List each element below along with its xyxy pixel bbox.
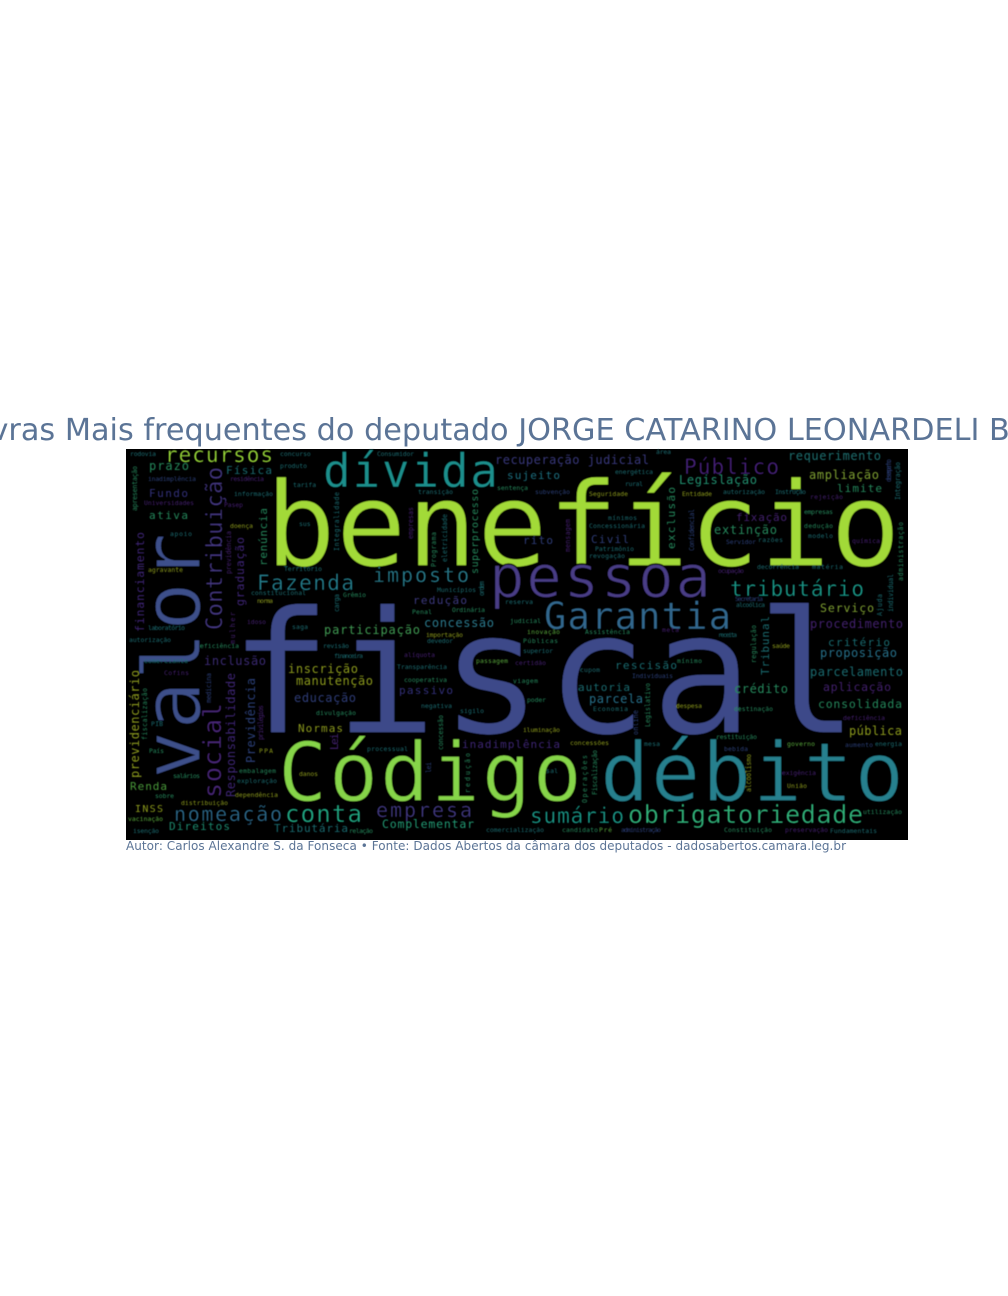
medium horizontal words: Física bbox=[226, 464, 272, 477]
small horizontal words: sus bbox=[299, 520, 311, 528]
small horizontal words: Transparência bbox=[397, 663, 447, 671]
medium vertical words: superprocesso bbox=[470, 489, 481, 574]
medium horizontal words: manutenção bbox=[296, 674, 373, 688]
small horizontal words: aumento bbox=[845, 741, 873, 749]
word: Contribuição: Contribuição bbox=[203, 467, 228, 630]
small vertical words: previdência bbox=[225, 531, 233, 574]
medium horizontal words: inscrição bbox=[288, 662, 358, 676]
small horizontal words: administração bbox=[621, 826, 661, 834]
small horizontal words: revogação bbox=[589, 552, 625, 560]
small horizontal words: União bbox=[787, 782, 807, 790]
small horizontal words: negativa bbox=[421, 702, 452, 710]
medium horizontal words: critério bbox=[828, 636, 890, 649]
small horizontal words: restituição bbox=[716, 733, 757, 741]
small vertical words: Fiscalização bbox=[591, 750, 599, 795]
word: dívida: dívida bbox=[323, 444, 498, 498]
small horizontal words: receita bbox=[718, 631, 737, 639]
small horizontal words: norma bbox=[257, 597, 273, 605]
small vertical words: Lei bbox=[328, 733, 341, 750]
word: Fazenda: Fazenda bbox=[257, 571, 354, 595]
small horizontal words: relação bbox=[349, 827, 373, 835]
small horizontal words: mesa bbox=[644, 740, 660, 748]
small horizontal words: Ordinária bbox=[452, 606, 485, 614]
small horizontal words: reserva bbox=[505, 598, 533, 606]
word: sumário: sumário bbox=[530, 804, 624, 828]
small vertical words: desempenho bbox=[885, 459, 893, 482]
small vertical words: Ajuda bbox=[876, 594, 884, 616]
small horizontal words: transição bbox=[418, 488, 453, 496]
medium horizontal words: Tributária bbox=[274, 822, 348, 835]
small horizontal words: energética bbox=[615, 468, 653, 476]
small horizontal words: exploração bbox=[237, 777, 277, 785]
small horizontal words: PIB bbox=[151, 720, 163, 728]
small horizontal words: superior bbox=[523, 647, 553, 655]
small horizontal words: comerciante bbox=[144, 657, 188, 665]
small horizontal words: saga bbox=[292, 623, 308, 631]
medium horizontal words: Normas bbox=[298, 722, 343, 735]
small horizontal words: Individuais bbox=[632, 672, 673, 680]
small vertical words bbox=[131, 459, 905, 803]
medium horizontal words: requerimento bbox=[788, 449, 881, 463]
small horizontal words: exigência bbox=[782, 769, 816, 777]
small horizontal words: certidão bbox=[515, 659, 546, 667]
word: débito: débito bbox=[600, 726, 904, 821]
small horizontal words: autorização bbox=[723, 488, 765, 496]
small horizontal words: Grêmio bbox=[343, 591, 366, 599]
word: fiscal: fiscal bbox=[229, 575, 859, 774]
word: recursos: recursos bbox=[165, 443, 273, 467]
small horizontal words: isenção bbox=[133, 827, 159, 835]
small horizontal words: devedor bbox=[427, 637, 453, 645]
small horizontal words: sal bbox=[546, 767, 558, 775]
small vertical words: redução bbox=[464, 753, 472, 793]
small horizontal words: Municípios bbox=[437, 586, 476, 594]
small horizontal words: bebida bbox=[724, 745, 748, 753]
medium horizontal words: Direitos bbox=[169, 820, 230, 833]
small horizontal words: Pré bbox=[599, 826, 612, 834]
word: valor: valor bbox=[126, 533, 219, 779]
small vertical words: online bbox=[632, 710, 640, 735]
small horizontal words: inovação bbox=[527, 628, 560, 636]
small horizontal words: concurso bbox=[280, 450, 311, 458]
word: social: social bbox=[198, 703, 227, 798]
small horizontal words: preservação bbox=[785, 826, 828, 834]
small horizontal words: meta bbox=[662, 626, 679, 634]
medium vertical words: exclusão bbox=[665, 487, 678, 549]
small horizontal words: divulgação bbox=[316, 709, 356, 717]
medium horizontal words: aplicação bbox=[823, 680, 891, 694]
word cloud background bbox=[126, 449, 908, 840]
small horizontal words: Território bbox=[284, 565, 322, 573]
small horizontal words: agravante bbox=[148, 566, 183, 574]
small horizontal words: informação bbox=[234, 490, 273, 498]
small horizontal words: matéria bbox=[812, 563, 843, 571]
small horizontal words: viagem bbox=[513, 677, 538, 685]
small horizontal words: ocupação bbox=[718, 567, 744, 575]
small horizontal words: sobre bbox=[155, 792, 174, 800]
word: empresa: empresa bbox=[376, 798, 472, 822]
small horizontal words: autorização bbox=[129, 636, 171, 644]
small horizontal words: Seguridade bbox=[589, 490, 628, 498]
word: obrigatoriedade: obrigatoriedade bbox=[628, 800, 863, 829]
small horizontal words bbox=[128, 448, 902, 835]
medium horizontal words: Complementar bbox=[382, 817, 474, 831]
word: tributário: tributário bbox=[730, 577, 864, 601]
small horizontal words: Servidor bbox=[726, 538, 756, 546]
medium horizontal words: proposição bbox=[820, 646, 897, 660]
small horizontal words: Secretaria bbox=[735, 595, 763, 603]
small horizontal words: idoso bbox=[247, 618, 266, 626]
small horizontal words: judicial bbox=[510, 617, 541, 625]
small horizontal words: salários bbox=[173, 772, 200, 780]
small vertical words: Programa bbox=[430, 532, 438, 567]
medium vertical words: Previdência bbox=[244, 678, 258, 763]
word: conta: conta bbox=[285, 800, 362, 828]
word: benefício: benefício bbox=[265, 456, 901, 594]
small horizontal words: importação bbox=[426, 631, 463, 639]
medium horizontal words: INSS bbox=[135, 804, 163, 815]
small vertical words: individual bbox=[887, 574, 895, 612]
small horizontal words: comercialização bbox=[486, 826, 544, 834]
medium horizontal words: educação bbox=[294, 691, 356, 705]
small vertical words: Operações bbox=[581, 755, 589, 803]
small horizontal words: saúde bbox=[772, 642, 790, 650]
small vertical words: regulação bbox=[750, 625, 758, 663]
small vertical words: medicina bbox=[205, 673, 213, 703]
medium horizontal words: rito bbox=[523, 534, 553, 547]
medium horizontal words: inclusão bbox=[204, 654, 266, 668]
small horizontal words: iluminação bbox=[523, 726, 560, 734]
small vertical words: Confidencial bbox=[688, 509, 696, 551]
small horizontal words: revisão bbox=[323, 642, 349, 650]
word: Garantia: Garantia bbox=[544, 595, 731, 638]
small horizontal words: mínimos bbox=[608, 514, 637, 522]
small horizontal words: Concessionária bbox=[589, 522, 645, 530]
medium horizontal words: pública bbox=[849, 724, 902, 738]
medium horizontal words: rescisão bbox=[615, 659, 677, 672]
small vertical words: mulher bbox=[229, 612, 237, 644]
medium horizontal words: autoria bbox=[578, 681, 630, 694]
small horizontal words: deficiência bbox=[843, 714, 885, 722]
small horizontal words: produto bbox=[280, 462, 307, 470]
medium horizontal words: passivo bbox=[399, 684, 453, 697]
medium horizontal words: procedimento bbox=[810, 617, 903, 631]
small vertical words: privilégios bbox=[257, 705, 265, 740]
small horizontal words: País bbox=[149, 747, 164, 755]
small vertical words: alcoolismo bbox=[745, 754, 753, 792]
small horizontal words: tarifa bbox=[293, 481, 316, 489]
small horizontal words: Instrução bbox=[775, 488, 806, 496]
medium horizontal words: Civil bbox=[591, 533, 629, 546]
small horizontal words: inadimplência bbox=[148, 475, 196, 483]
small vertical words: fiscalização bbox=[141, 688, 149, 740]
small horizontal words: Economia bbox=[593, 705, 628, 713]
small horizontal words: PPA bbox=[259, 747, 273, 755]
small horizontal words: residência bbox=[230, 475, 264, 483]
medium horizontal words: sujeito bbox=[507, 469, 560, 482]
small horizontal words: passagem bbox=[476, 657, 508, 665]
small horizontal words: dedução bbox=[804, 522, 833, 530]
medium vertical words: graduação bbox=[233, 537, 247, 606]
medium horizontal words: fixação bbox=[736, 511, 787, 524]
small horizontal words: área bbox=[656, 448, 671, 456]
small horizontal words: processual bbox=[367, 745, 408, 753]
small horizontal words: Constituição bbox=[724, 826, 772, 834]
small horizontal words: doença bbox=[230, 522, 253, 530]
small horizontal words: constitucional bbox=[251, 589, 306, 597]
small horizontal words: energia bbox=[875, 740, 902, 748]
small horizontal words: Pasep bbox=[224, 501, 243, 509]
small horizontal words: Fundamentais bbox=[830, 827, 877, 835]
small horizontal words: financeira bbox=[334, 652, 363, 660]
medium horizontal words: participação bbox=[324, 623, 420, 637]
medium horizontal words bbox=[130, 449, 903, 835]
small vertical words: concessão bbox=[437, 715, 445, 750]
small horizontal words: distribuição bbox=[181, 799, 228, 807]
medium vertical words: renúncia bbox=[257, 508, 270, 566]
small vertical words: Integralidade bbox=[333, 492, 341, 551]
medium horizontal words: prazo bbox=[149, 459, 189, 473]
small horizontal words: Patrimônio bbox=[595, 545, 634, 553]
word: pessoa: pessoa bbox=[489, 542, 711, 611]
medium horizontal words: Legislação bbox=[679, 473, 757, 487]
small horizontal words: dependência bbox=[235, 791, 278, 799]
word: nomeação: nomeação bbox=[174, 802, 282, 826]
word: Código: Código bbox=[278, 726, 582, 821]
small vertical words: mensagem bbox=[564, 519, 572, 552]
medium horizontal words: Fundo bbox=[149, 487, 188, 500]
medium horizontal words: ativa bbox=[149, 509, 188, 522]
medium horizontal words: ampliação bbox=[809, 468, 879, 482]
small horizontal words: apoio bbox=[170, 530, 192, 538]
small horizontal words: despesa bbox=[676, 702, 702, 710]
small horizontal words: Consumidor bbox=[377, 450, 414, 458]
medium horizontal words: parcela bbox=[589, 692, 643, 706]
small vertical words: Legislativo bbox=[644, 683, 652, 727]
small horizontal words: vacinação bbox=[128, 815, 163, 823]
medium horizontal words: Renda bbox=[130, 780, 167, 793]
medium horizontal words: extinção bbox=[714, 523, 777, 537]
medium vertical words bbox=[128, 487, 772, 797]
small vertical words: administração bbox=[897, 522, 905, 581]
small horizontal words: alcoólica bbox=[736, 601, 765, 609]
medium horizontal words: recuperação judicial bbox=[495, 453, 649, 467]
small horizontal words: candidato bbox=[562, 826, 598, 834]
small horizontal words: destinação bbox=[734, 705, 773, 713]
small horizontal words: sentença bbox=[497, 484, 528, 492]
small horizontal words: alíquota bbox=[404, 651, 435, 659]
small vertical words: empresas bbox=[407, 507, 415, 539]
small horizontal words: subvenção bbox=[535, 488, 570, 496]
small horizontal words: Penal bbox=[412, 608, 432, 616]
small horizontal words: poder bbox=[527, 696, 546, 704]
footer credit: Autor: Carlos Alexandre S. da Fonseca • Fonte: Dados Abertos da câmara dos deputados - dadosabertos.camara.leg.br bbox=[126, 839, 846, 853]
small horizontal words: sigilo bbox=[460, 707, 484, 715]
small horizontal words: modelo bbox=[808, 532, 833, 540]
medium horizontal words: redução bbox=[413, 594, 467, 607]
small horizontal words: eficiência bbox=[200, 642, 239, 650]
word: imposto: imposto bbox=[373, 563, 469, 587]
small horizontal words: rodovia bbox=[130, 450, 156, 458]
small horizontal words: concessões bbox=[570, 739, 609, 747]
small horizontal words: cupom bbox=[580, 666, 600, 674]
small horizontal words: Assistência bbox=[585, 628, 630, 636]
small horizontal words: empresas bbox=[804, 508, 833, 516]
small horizontal words: mínimo bbox=[677, 657, 702, 665]
small horizontal words: laboratório bbox=[148, 624, 185, 632]
medium vertical words: Responsabilidade bbox=[224, 673, 238, 797]
small vertical words: lei bbox=[425, 762, 433, 773]
small horizontal words: embalagem bbox=[239, 767, 276, 775]
small horizontal words: cooperativa bbox=[404, 676, 447, 684]
medium vertical words: Tribunal bbox=[759, 616, 772, 675]
small vertical words: ordem bbox=[478, 581, 486, 596]
medium vertical words: previdenciário bbox=[128, 670, 142, 778]
small horizontal words: razões bbox=[758, 536, 783, 544]
small horizontal words: Universidades bbox=[144, 499, 194, 507]
small vertical words: eletricidade bbox=[441, 514, 449, 562]
word cloud words bbox=[126, 443, 905, 835]
small horizontal words: Entidade bbox=[682, 490, 712, 498]
small vertical words: apresentação bbox=[131, 466, 139, 511]
medium vertical words: financiamento bbox=[133, 532, 147, 632]
medium horizontal words: concessão bbox=[424, 616, 494, 630]
medium horizontal words: Serviço bbox=[820, 601, 874, 615]
medium horizontal words: crédito bbox=[734, 682, 788, 696]
small horizontal words: química bbox=[852, 537, 880, 545]
medium horizontal words: inadimplência bbox=[462, 738, 560, 751]
small horizontal words: danos bbox=[299, 770, 318, 778]
small vertical words: carga bbox=[333, 594, 341, 612]
small horizontal words: utilização bbox=[863, 808, 902, 816]
small vertical words: Integração bbox=[894, 462, 902, 500]
medium horizontal words: parcelamento bbox=[810, 665, 903, 679]
small horizontal words: decorrência bbox=[757, 563, 799, 571]
small horizontal words: Públicas bbox=[523, 637, 558, 645]
small horizontal words: rural bbox=[625, 480, 643, 488]
small horizontal words: Cofins bbox=[164, 669, 189, 677]
panel: word cloud bbox=[126, 443, 908, 840]
small horizontal words: rejeição bbox=[810, 493, 843, 501]
word: Público: Público bbox=[684, 455, 779, 479]
medium horizontal words: consolidada bbox=[818, 697, 902, 711]
small horizontal words: governo bbox=[787, 740, 815, 748]
medium horizontal words: limite bbox=[837, 482, 882, 495]
